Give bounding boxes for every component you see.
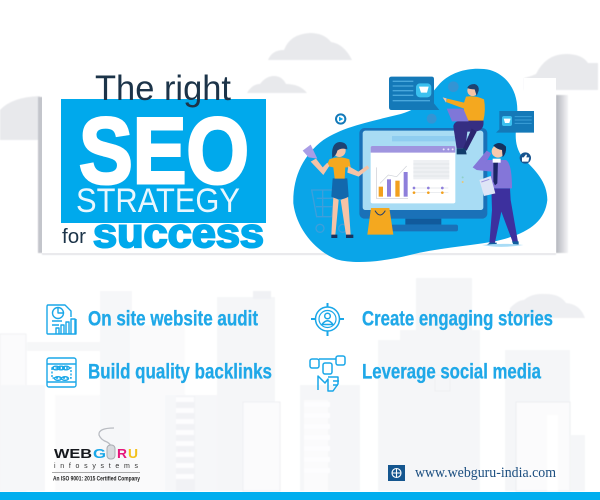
shopping cart shadow [312, 190, 347, 232]
heading: STRATEGY: STRATEGY [76, 182, 240, 220]
bottom bar [0, 492, 600, 500]
background: clouds [0, 33, 598, 318]
label: Build quality backlinks [88, 360, 272, 384]
mouse body [107, 445, 115, 459]
man on monitor with laptop [443, 84, 485, 154]
feature: create engaging stories [311, 303, 553, 336]
logo name: WEB [54, 446, 92, 461]
globe glyph [392, 468, 401, 478]
heading: SEO: SEO [79, 98, 249, 203]
heading: The right: The right [95, 69, 231, 108]
url: www.webguru-india.com [415, 465, 556, 481]
icon: like bubble [427, 114, 437, 124]
label: On site website audit [88, 308, 258, 330]
logo: WebGuru Infosystems [52, 428, 140, 482]
browser window chart [371, 146, 455, 203]
mouse icon [99, 428, 114, 448]
blue blob [293, 69, 547, 262]
logo letter U: U [128, 446, 138, 461]
icon: site links [47, 358, 76, 387]
icon: thumbs-up bubble [520, 152, 531, 164]
play triangle [339, 117, 343, 121]
logo letter R: R [117, 446, 128, 461]
icon: audience target [311, 303, 344, 336]
monitor [359, 128, 487, 231]
heading: for: for [62, 226, 86, 248]
woman with megaphone [297, 140, 369, 238]
hero panel [38, 78, 568, 255]
thumb shape [522, 154, 529, 162]
feature: leverage social media [310, 356, 541, 391]
floating card: cart small [496, 111, 534, 133]
icon: heart bubble [448, 81, 459, 92]
logo tagline: infosystems [54, 463, 138, 470]
shopping bag [367, 208, 393, 235]
icon: video play bubble [335, 113, 346, 125]
logo divider [52, 471, 140, 474]
feature: build quality backlinks [47, 358, 272, 387]
heading blue box [61, 99, 266, 223]
label: Leverage social media [362, 360, 541, 384]
feature: on site website audit [47, 305, 258, 334]
logo certification: An ISO 9001: 2015 Certified Company [53, 476, 140, 482]
illustration: SEO team around monitor [293, 69, 547, 262]
website link [388, 465, 556, 481]
floating card: cart large [389, 77, 439, 110]
man with clipboard on phone [473, 143, 523, 247]
logo letter G: G [93, 446, 106, 461]
heading: success: success [93, 210, 264, 256]
icon: globe [388, 465, 405, 481]
background: city skyline [0, 278, 585, 491]
icon: report [47, 305, 76, 334]
icon: hand with social apps [310, 356, 345, 391]
label: Create engaging stories [362, 308, 553, 330]
